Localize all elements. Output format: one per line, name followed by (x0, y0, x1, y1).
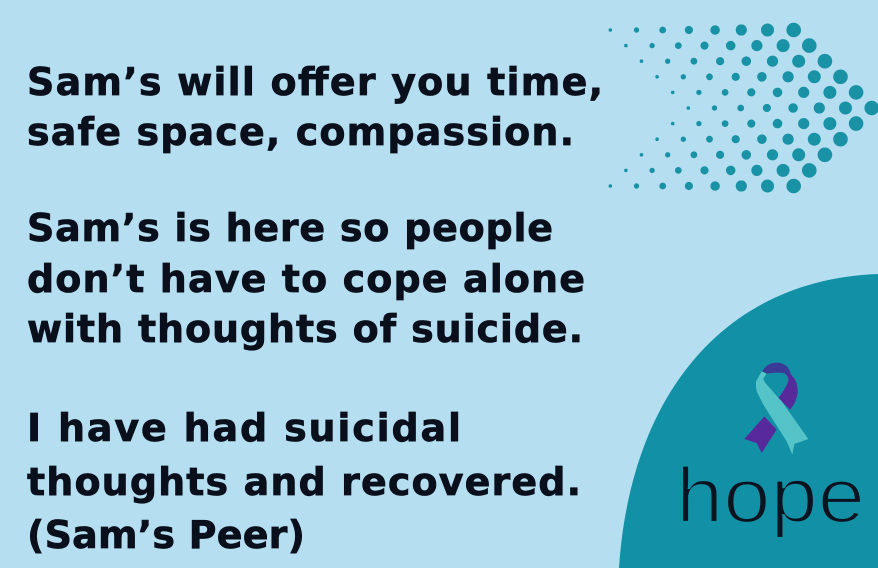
text block: why Sam's is here: don’t have to cope alone (27, 257, 585, 301)
text block: what Sam's offers: safe space, compassion. (27, 110, 574, 154)
text block: why Sam's is here: Sam’s is here so people (27, 206, 553, 250)
text block: why Sam's is here: with thoughts of suicide. (27, 307, 583, 351)
text block: peer quote: thoughts and recovered. (27, 460, 581, 504)
text block: why Sam's is here (27, 206, 585, 351)
text block: peer quote: (Sam’s Peer) (27, 513, 305, 557)
hope logo wordmark: hope (676, 451, 865, 539)
text block: peer quote: I have had suicidal (27, 406, 461, 450)
text block: what Sam's offers: Sam’s will offer you time, (27, 60, 603, 104)
text block: peer quote (27, 406, 581, 557)
text block: what Sam's offers (27, 60, 603, 154)
halftone dot arrow (610, 30, 872, 186)
teal corner shape (619, 274, 878, 568)
icon: awareness ribbon (744, 363, 808, 455)
